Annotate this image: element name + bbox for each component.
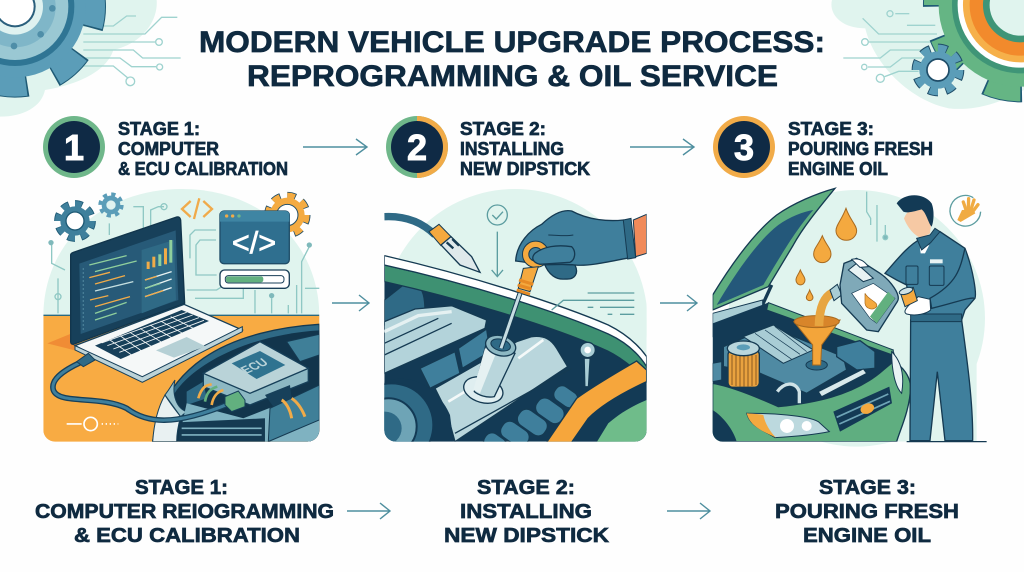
title: MODERN VEHICLE UPGRADE PROCESS: (199, 26, 825, 59)
title: REPROGRAMMING & OIL SERVICE (247, 60, 778, 93)
step 2 label: NEW DIPSTICK (460, 159, 590, 179)
caption: stage 1: COMPUTER REIOGRAMMING (35, 500, 334, 523)
icon: glove in circle (950, 195, 981, 226)
step 1 label: STAGE 1: (118, 119, 200, 139)
badge 3 (713, 116, 775, 178)
caption: stage 3: ENGINE OIL (803, 524, 931, 547)
mechanic (885, 195, 975, 441)
icon: orange code tag (182, 198, 212, 219)
icon: oil drops (796, 208, 857, 301)
step header 3 (713, 116, 933, 179)
step 2 label (460, 119, 590, 179)
engine bay (384, 268, 647, 442)
code window: </> (232, 226, 276, 260)
badge 1: 1 (64, 127, 84, 168)
icon: small blue gear (916, 48, 960, 92)
arrow: header 1 to 2 (303, 139, 367, 155)
caption: stage 2: STAGE 2: (477, 476, 575, 499)
step 3 label (788, 119, 933, 179)
caption: stage 3 (775, 476, 959, 547)
icon: small gear (101, 195, 121, 215)
code window (220, 211, 289, 264)
cable (53, 353, 230, 420)
arrow: caption 2 to 3 (667, 503, 710, 519)
step 1 label: & ECU CALIBRATION (118, 159, 288, 179)
oil filter (727, 341, 759, 387)
car engine bay (153, 324, 319, 442)
callout lines (552, 293, 634, 314)
car body (713, 303, 911, 442)
decorative lines (867, 192, 888, 242)
step 3 label: ENGINE OIL (788, 159, 888, 179)
caption: stage 2: INSTALLING (460, 500, 592, 523)
step 2 label: STAGE 2: (460, 119, 546, 139)
caption: stage 1: & ECU CALIBRATION (74, 524, 300, 547)
oil jug (830, 258, 898, 332)
icon: orange gear (268, 196, 307, 234)
caption: stage 3: POURING FRESH (775, 500, 959, 523)
ECU module (198, 342, 308, 418)
funnel and oil stream (794, 293, 840, 365)
icon: check and down arrow (487, 205, 507, 277)
bolt (580, 342, 595, 387)
orange car body corner (547, 361, 647, 442)
dipstick rod (501, 293, 520, 348)
panel: installing dipstick (384, 189, 647, 442)
step 1 label: COMPUTER (118, 139, 219, 159)
arrow: panel 2 to 3 (660, 295, 697, 311)
ground line (907, 440, 987, 444)
title (199, 26, 825, 93)
panel: pouring engine oil (713, 188, 987, 447)
step 1 label (118, 119, 288, 179)
badge 1 (43, 116, 105, 178)
caption: stage 2: NEW DIPSTICK (444, 524, 609, 547)
arrow: panel 1 to 2 (332, 295, 369, 311)
laptop (71, 217, 242, 382)
step header 2 (386, 116, 590, 179)
icon: blue gear (58, 204, 92, 238)
gloved hand (516, 211, 647, 294)
arrow: caption 1 to 2 (347, 503, 390, 519)
dipstick tube (463, 336, 516, 404)
step 2 label: INSTALLING (460, 139, 564, 159)
air hose and nozzle (384, 217, 480, 272)
raised hood (713, 188, 835, 337)
decoration: top-right gears with circuit traces (831, 0, 1024, 109)
arrow: header 2 to 3 (630, 139, 694, 155)
step header 1 (43, 116, 288, 179)
step 3 label: POURING FRESH (788, 139, 933, 159)
panel: laptop and ECU calibration (43, 189, 321, 442)
dipstick handle (517, 244, 546, 294)
caption: stage 1: STAGE 1: (135, 476, 228, 499)
step 3 label: STAGE 3: (788, 119, 874, 139)
progress bar (220, 270, 289, 288)
badge 3: 3 (734, 127, 754, 168)
icon: white bolt glyph (67, 417, 118, 431)
badge 2 (386, 116, 448, 178)
caption: stage 3: STAGE 3: (819, 476, 916, 499)
caption: stage 1 (35, 476, 334, 547)
engine block (713, 325, 875, 403)
headlight (747, 413, 829, 438)
decoration: top-left gear with circuit traces (0, 0, 181, 117)
ECU module: ECU (237, 356, 272, 376)
badge 2: 2 (407, 127, 427, 168)
caption: stage 2 (444, 476, 609, 547)
hood edge (384, 256, 647, 382)
